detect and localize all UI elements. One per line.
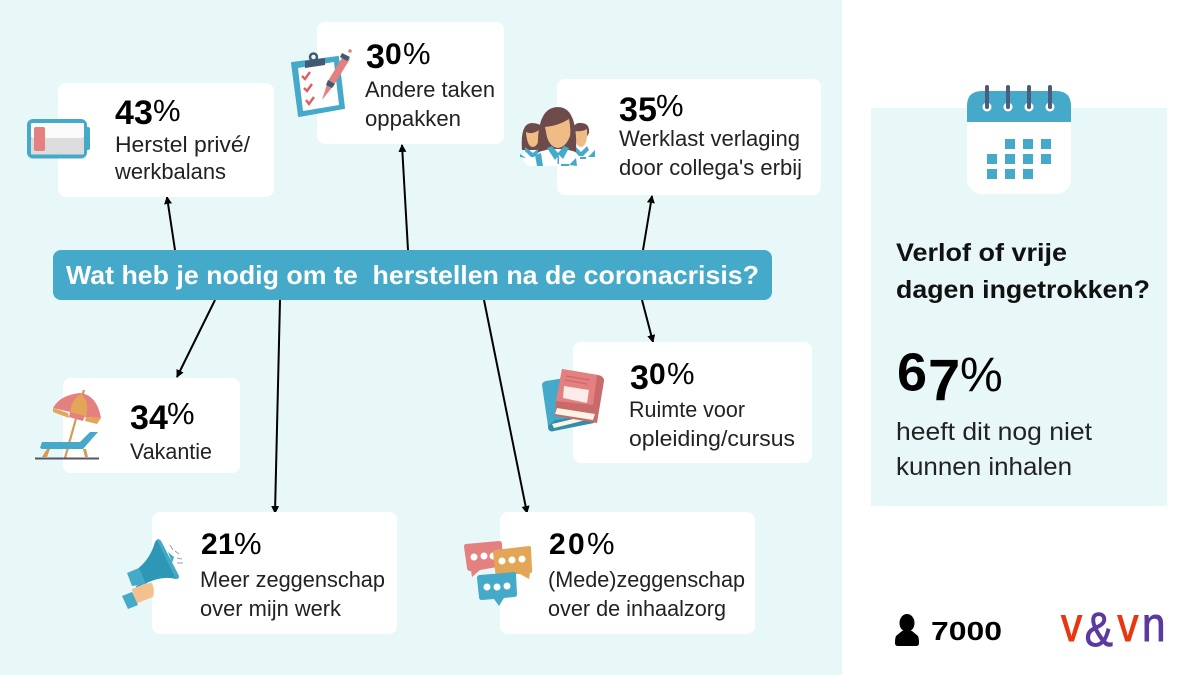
icon: battery [27, 119, 90, 158]
panel: 35% werklast: 3 [619, 91, 638, 129]
panel: 20% medezeggenschap: (Mede)zeggenschap [548, 567, 745, 592]
panel: 20% medezeggenschap: % [587, 526, 615, 561]
panel: 34% vakantie: 4 [149, 399, 168, 437]
panel: 30% opleiding [573, 342, 812, 463]
panel: 20% medezeggenschap [500, 512, 755, 634]
icon: clipboard with pen [292, 49, 352, 116]
panel: 34% vakantie [63, 378, 240, 473]
background panel [0, 0, 842, 675]
panel: verlof sidebar [871, 108, 1167, 506]
panel: 43% privé/werkbalans [58, 83, 274, 197]
panel: verlof sidebar: % [960, 349, 1003, 402]
icon: beach umbrella and lounger [35, 390, 101, 458]
respondent count: 7000 [931, 616, 1002, 646]
panel: 20% medezeggenschap: 0 [568, 528, 585, 561]
panel: 30% andere taken: % [403, 36, 431, 71]
panel: 43% privé/werkbalans: 4 [115, 94, 134, 132]
panel: 30% andere taken [317, 22, 504, 144]
panel: 21% zeggenschap werk: Meer zeggenschap [200, 567, 385, 592]
panel: 43% privé/werkbalans: % [153, 93, 181, 128]
panel: 20% medezeggenschap: 2 [549, 528, 566, 561]
panel: 30% andere taken: oppakken [365, 106, 461, 131]
panel: 35% werklast [557, 79, 821, 195]
panel: 43% privé/werkbalans: Herstel privé/ [115, 132, 251, 157]
icon: speech bubbles [464, 541, 532, 606]
panel: 30% opleiding: Ruimte voor [629, 397, 745, 422]
heading: Verlof of vrije [896, 239, 1067, 267]
panel: 20% medezeggenschap: over de inhaalzorg [548, 596, 726, 621]
icon: colleagues [520, 107, 596, 166]
panel: 35% werklast: Werklast verlaging [619, 126, 800, 151]
panel: 30% andere taken: 3 [366, 38, 385, 76]
panel: 35% werklast: 5 [638, 91, 657, 129]
icon: calendar [967, 87, 1071, 194]
panel: 30% opleiding: % [667, 356, 695, 391]
panel: 21% zeggenschap werk: over mijn werk [200, 596, 342, 621]
panel: 21% zeggenschap werk: 1 [218, 528, 235, 561]
panel: verlof sidebar: kunnen inhalen [896, 453, 1072, 481]
panel: 43% privé/werkbalans: werkbalans [114, 159, 226, 184]
panel: 30% andere taken: 0 [385, 38, 402, 71]
logo: v&vn: v [1117, 597, 1139, 652]
panel: 21% zeggenschap werk: 2 [201, 528, 218, 561]
central question banner [53, 250, 772, 300]
panel: 34% vakantie: Vakantie [130, 439, 212, 464]
panel: 30% opleiding: 0 [649, 358, 666, 391]
panel: 35% werklast: % [656, 88, 684, 123]
logo: v&vn: n [1142, 597, 1165, 652]
panel: 30% opleiding: opleiding/cursus [629, 426, 795, 451]
logo: v&vn: & [1085, 602, 1113, 657]
respondent count [895, 614, 1002, 646]
panel: verlof sidebar: heeft dit nog niet [896, 418, 1092, 446]
panel: 34% vakantie: % [167, 396, 195, 431]
panel: 21% zeggenschap werk [152, 512, 397, 634]
panel: 21% zeggenschap werk: % [234, 526, 262, 561]
panel: 43% privé/werkbalans: 3 [134, 94, 153, 132]
icon: megaphone with hand [122, 539, 183, 609]
icon: person [895, 614, 919, 646]
central question banner: Wat heb je nodig om te herstellen na de coronacrisis? [66, 260, 759, 290]
panel: verlof sidebar: dagen ingetrokken? [896, 276, 1150, 304]
panel: 30% andere taken: Andere taken [365, 77, 495, 102]
panel: 30% opleiding: 3 [630, 359, 649, 397]
panel: verlof sidebar: 6 [897, 342, 927, 402]
arrows [167, 145, 653, 513]
panel: 35% werklast: door collega's erbij [619, 155, 802, 180]
panel: verlof sidebar: 7 [928, 348, 960, 413]
logo: v&vn: v [1061, 597, 1082, 652]
icon: books [542, 369, 604, 431]
panel: 34% vakantie: 3 [130, 399, 149, 437]
